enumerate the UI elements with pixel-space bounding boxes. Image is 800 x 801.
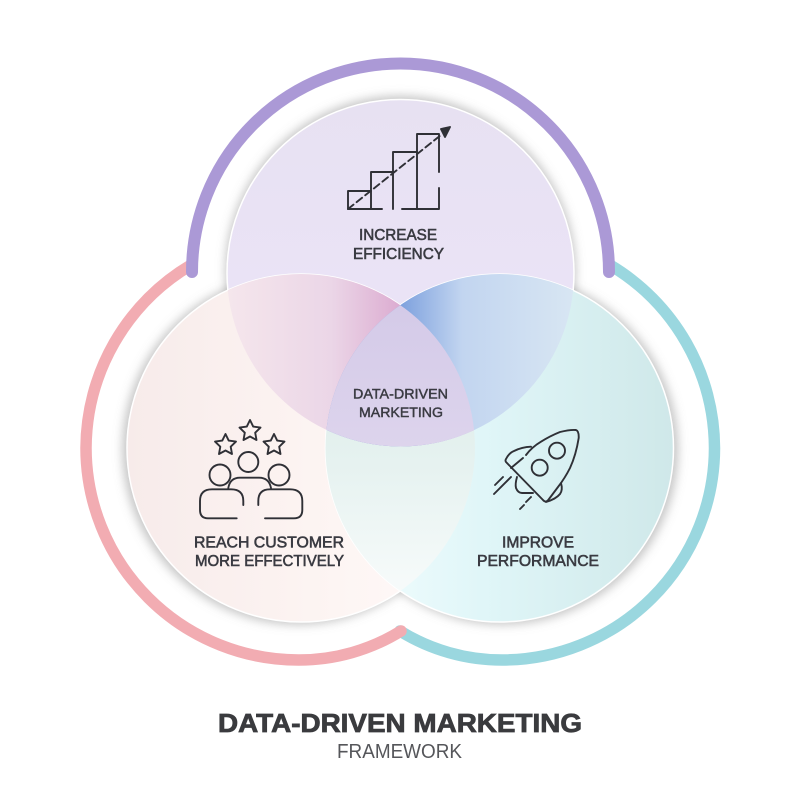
subtitle: FRAMEWORK — [337, 741, 463, 763]
label: reach customer: MORE EFFECTIVELY — [195, 553, 344, 570]
icon: customers with stars — [200, 420, 302, 518]
label: increase efficiency: INCREASE — [359, 227, 437, 244]
icon: growth chart — [348, 127, 450, 209]
venn diagram — [127, 100, 674, 622]
overlap: top and right — [326, 274, 573, 446]
label: increase efficiency — [353, 227, 444, 263]
label: center: MARKETING — [359, 404, 443, 420]
label: improve performance — [477, 534, 599, 570]
title: DATA-DRIVEN MARKETING — [218, 708, 582, 738]
circle: improve performance — [326, 274, 674, 622]
outer ring: teal — [400, 265, 714, 660]
overlap: center — [326, 305, 474, 446]
label: center — [353, 386, 448, 420]
label: improve performance: IMPROVE — [502, 534, 574, 552]
icon: rocket — [494, 430, 579, 509]
circle: reach customer — [127, 274, 475, 622]
label: reach customer: REACH CUSTOMER — [194, 534, 344, 552]
outer ring: purple — [192, 64, 609, 272]
label: center: DATA-DRIVEN — [353, 386, 448, 402]
overlap: left and right — [326, 430, 475, 590]
circle shadows — [122, 96, 678, 624]
label: improve performance: PERFORMANCE — [477, 553, 599, 570]
overlap: top and left — [228, 274, 473, 446]
circle: increase efficiency — [227, 100, 574, 446]
label: increase efficiency: EFFICIENCY — [353, 246, 444, 263]
outer ring: pink — [86, 265, 401, 660]
label: reach customer — [194, 534, 344, 570]
